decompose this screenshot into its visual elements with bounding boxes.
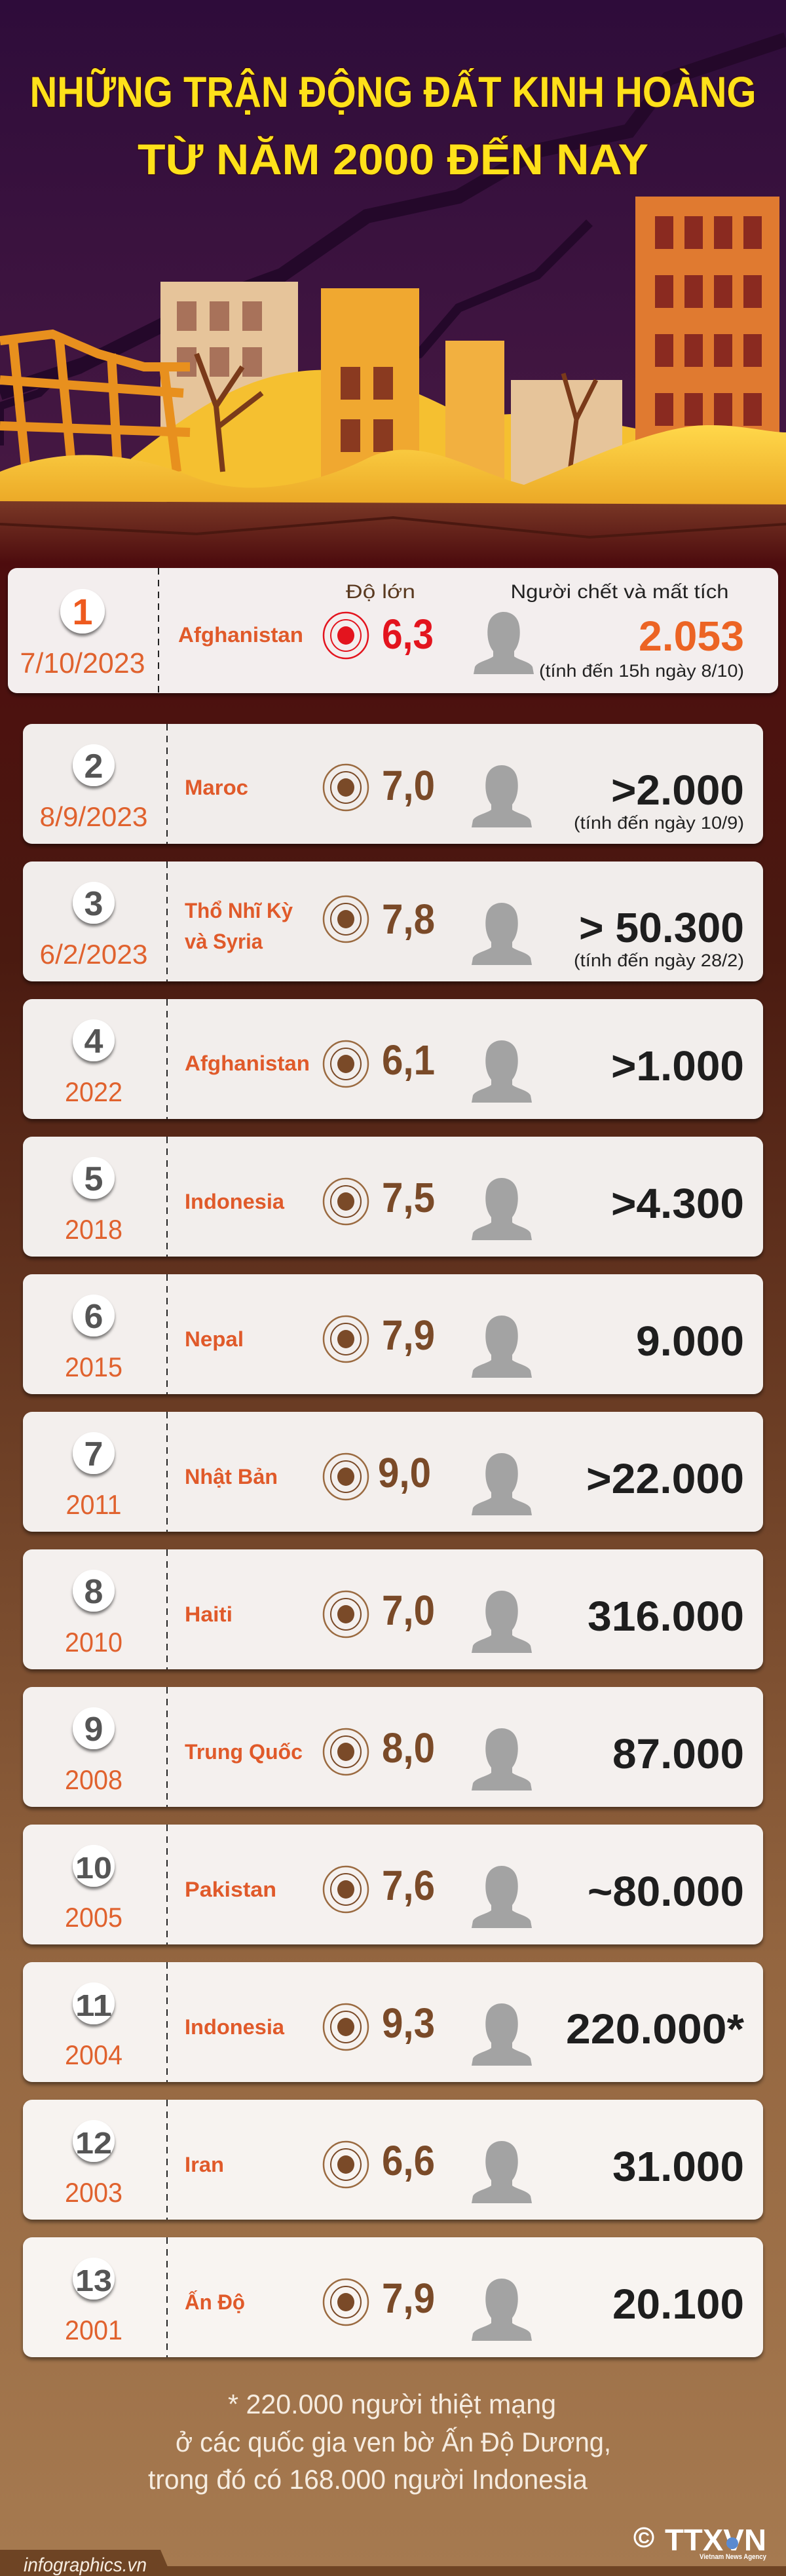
card 4: Afghanistan 2022: [23, 999, 763, 1119]
beige building: [160, 282, 298, 452]
card 9: Trung Quốc 2008: 9: [84, 1711, 103, 1749]
card 13: Ấn Độ 2001: 7,9: [382, 2275, 435, 2322]
sand dunes: [0, 425, 786, 518]
card 6: Nepal 2015: [23, 1274, 763, 1394]
card 11: Indonesia 2004: [23, 1962, 763, 2082]
card 10: Pakistan 2005: 10: [75, 1851, 112, 1885]
card 9: Trung Quốc 2008: 8,0: [382, 1724, 435, 1771]
card 2: Maroc: >2.000: [611, 767, 744, 814]
card 2: Maroc: 8/9/2023: [39, 801, 148, 832]
logo: TTXVN: TTXVN: [665, 2523, 766, 2557]
card 11: Indonesia 2004: 11: [75, 1988, 112, 2022]
card 6: Nepal 2015: Nepal: [185, 1327, 244, 1351]
footer strip: [0, 2566, 786, 2576]
card 3: Thổ Nhĩ Kỳ và Syria: > 50.300: [579, 904, 744, 951]
card 2: Maroc: 2: [84, 748, 103, 786]
trees: [196, 354, 262, 472]
card 1: Afghanistan 7/10/2023: 1: [72, 591, 93, 632]
card 3: Thổ Nhĩ Kỳ và Syria: Thổ Nhĩ Kỳ: [185, 899, 293, 922]
source tab: infographics.vn: infographics.vn: [24, 2554, 147, 2576]
right building: [635, 197, 779, 459]
card 10: Pakistan 2005: Pakistan: [185, 1878, 276, 1901]
card 4: Afghanistan 2022: 6,1: [382, 1036, 435, 1084]
card 11: Indonesia 2004: 2004: [65, 2039, 122, 2070]
card 2: Maroc: (tính đến ngày 10/9): [574, 813, 744, 833]
card 1: Afghanistan 7/10/2023: Người chết và mất tích: [511, 581, 728, 603]
card 2: Maroc: Maroc: [185, 776, 248, 799]
card 5: Indonesia 2018: >4.300: [611, 1180, 744, 1227]
card 1: Afghanistan 7/10/2023: 2.053: [639, 613, 744, 660]
card 12: Iran 2003: [23, 2100, 763, 2220]
card 8: Haiti 2010: 2010: [65, 1627, 122, 1657]
card 4: Afghanistan 2022: 4: [84, 1023, 103, 1061]
source tab: infographics.vn: [0, 2550, 172, 2576]
card 12: Iran 2003: 2003: [65, 2177, 122, 2208]
card 4: Afghanistan 2022: 2022: [65, 1076, 122, 1107]
title: [30, 67, 756, 183]
card 13: Ấn Độ 2001: 13: [75, 2263, 112, 2298]
card 10: Pakistan 2005: 2005: [65, 1902, 122, 1933]
card 3: Thổ Nhĩ Kỳ và Syria: 6/2/2023: [39, 939, 148, 970]
tall yellow building: [321, 288, 419, 498]
card 11: Indonesia 2004: Indonesia: [185, 2015, 284, 2039]
card 4: Afghanistan 2022: >1.000: [611, 1042, 744, 1089]
card 9: Trung Quốc 2008: 87.000: [612, 1730, 744, 1777]
card 2: Maroc: [23, 724, 763, 844]
card 1: Afghanistan 7/10/2023: [8, 568, 778, 693]
background: [0, 550, 786, 2576]
card 1: Afghanistan 7/10/2023: 6,3: [382, 611, 434, 658]
card 3: Thổ Nhĩ Kỳ và Syria: (tính đến ngày 28/2): [574, 951, 744, 970]
card 8: Haiti 2010: 8: [84, 1573, 103, 1611]
card 12: Iran 2003: 6,6: [382, 2137, 435, 2184]
card 6: Nepal 2015: 6: [84, 1298, 103, 1336]
logo: TTXVN: Vietnam News Agency: [700, 2553, 767, 2561]
card 12: Iran 2003: 31.000: [612, 2143, 744, 2190]
footnote: * 220.000 người thiệt mạng: [228, 2389, 556, 2419]
card 7: Nhật Bản 2011: 9,0: [378, 1449, 431, 1496]
card 3: Thổ Nhĩ Kỳ và Syria: 7,8: [382, 896, 435, 943]
card 12: Iran 2003: 12: [75, 2126, 112, 2160]
card 6: Nepal 2015: 7,9: [382, 1312, 435, 1359]
card 13: Ấn Độ 2001: 20.100: [612, 2281, 744, 2328]
back sand hill: [131, 370, 655, 498]
card 2: Maroc: 7,0: [382, 762, 435, 809]
card 3: Thổ Nhĩ Kỳ và Syria: 3: [84, 885, 103, 923]
logo: TTXVN: [635, 2523, 767, 2561]
card 10: Pakistan 2005: ~80.000: [588, 1868, 744, 1915]
card 3: Thổ Nhĩ Kỳ và Syria: [23, 862, 763, 981]
card 7: Nhật Bản 2011: [23, 1412, 763, 1532]
card 9: Trung Quốc 2008: Trung Quốc: [185, 1740, 303, 1764]
logo: TTXVN: C: [638, 2529, 650, 2547]
card 11: Indonesia 2004: 220.000*: [566, 2005, 744, 2053]
left scaffold ruins: [0, 334, 190, 472]
card 1: Afghanistan 7/10/2023: (tính đến 15h ngày 8/10): [539, 661, 744, 681]
card 8: Haiti 2010: 7,0: [382, 1587, 435, 1634]
card 7: Nhật Bản 2011: Nhật Bản: [185, 1465, 278, 1488]
card 8: Haiti 2010: Haiti: [185, 1602, 233, 1626]
card 10: Pakistan 2005: 7,6: [382, 1862, 435, 1909]
card 1: Afghanistan 7/10/2023: 7/10/2023: [20, 647, 145, 679]
footnote: trong đó có 168.000 người Indonesia: [148, 2464, 588, 2495]
footnote: [148, 2389, 611, 2495]
card 8: Haiti 2010: [23, 1549, 763, 1669]
card 13: Ấn Độ 2001: Ấn Độ: [185, 2290, 245, 2314]
footnote: ở các quốc gia ven bờ Ấn Độ Dương,: [176, 2427, 611, 2457]
card 1: Afghanistan 7/10/2023: Độ lớn: [346, 581, 415, 603]
card 1: Afghanistan 7/10/2023: Afghanistan: [178, 623, 303, 647]
card 5: Indonesia 2018: 2018: [65, 1214, 122, 1245]
card 6: Nepal 2015: 9.000: [636, 1317, 744, 1365]
card 10: Pakistan 2005: [23, 1825, 763, 1944]
hero illustration: [0, 0, 786, 563]
card 3: Thổ Nhĩ Kỳ và Syria: và Syria: [185, 930, 263, 953]
card 9: Trung Quốc 2008: 2008: [65, 1764, 122, 1795]
card 13: Ấn Độ 2001: 2001: [65, 2315, 122, 2345]
card 7: Nhật Bản 2011: >22.000: [586, 1455, 744, 1502]
card 11: Indonesia 2004: 9,3: [382, 1999, 435, 2047]
card 6: Nepal 2015: 2015: [65, 1352, 122, 1382]
card 5: Indonesia 2018: 5: [84, 1160, 103, 1198]
card 5: Indonesia 2018: [23, 1137, 763, 1257]
card 5: Indonesia 2018: Indonesia: [185, 1190, 284, 1213]
card 7: Nhật Bản 2011: 2011: [66, 1489, 122, 1520]
title: TỪ NĂM 2000 ĐẾN NAY: [138, 135, 648, 183]
card 12: Iran 2003: Iran: [185, 2153, 224, 2176]
card 5: Indonesia 2018: 7,5: [382, 1174, 435, 1221]
card 13: Ấn Độ 2001: [23, 2237, 763, 2357]
card 4: Afghanistan 2022: Afghanistan: [185, 1051, 310, 1075]
card 7: Nhật Bản 2011: 7: [84, 1435, 103, 1473]
card 8: Haiti 2010: 316.000: [588, 1593, 744, 1640]
card 9: Trung Quốc 2008: [23, 1687, 763, 1807]
